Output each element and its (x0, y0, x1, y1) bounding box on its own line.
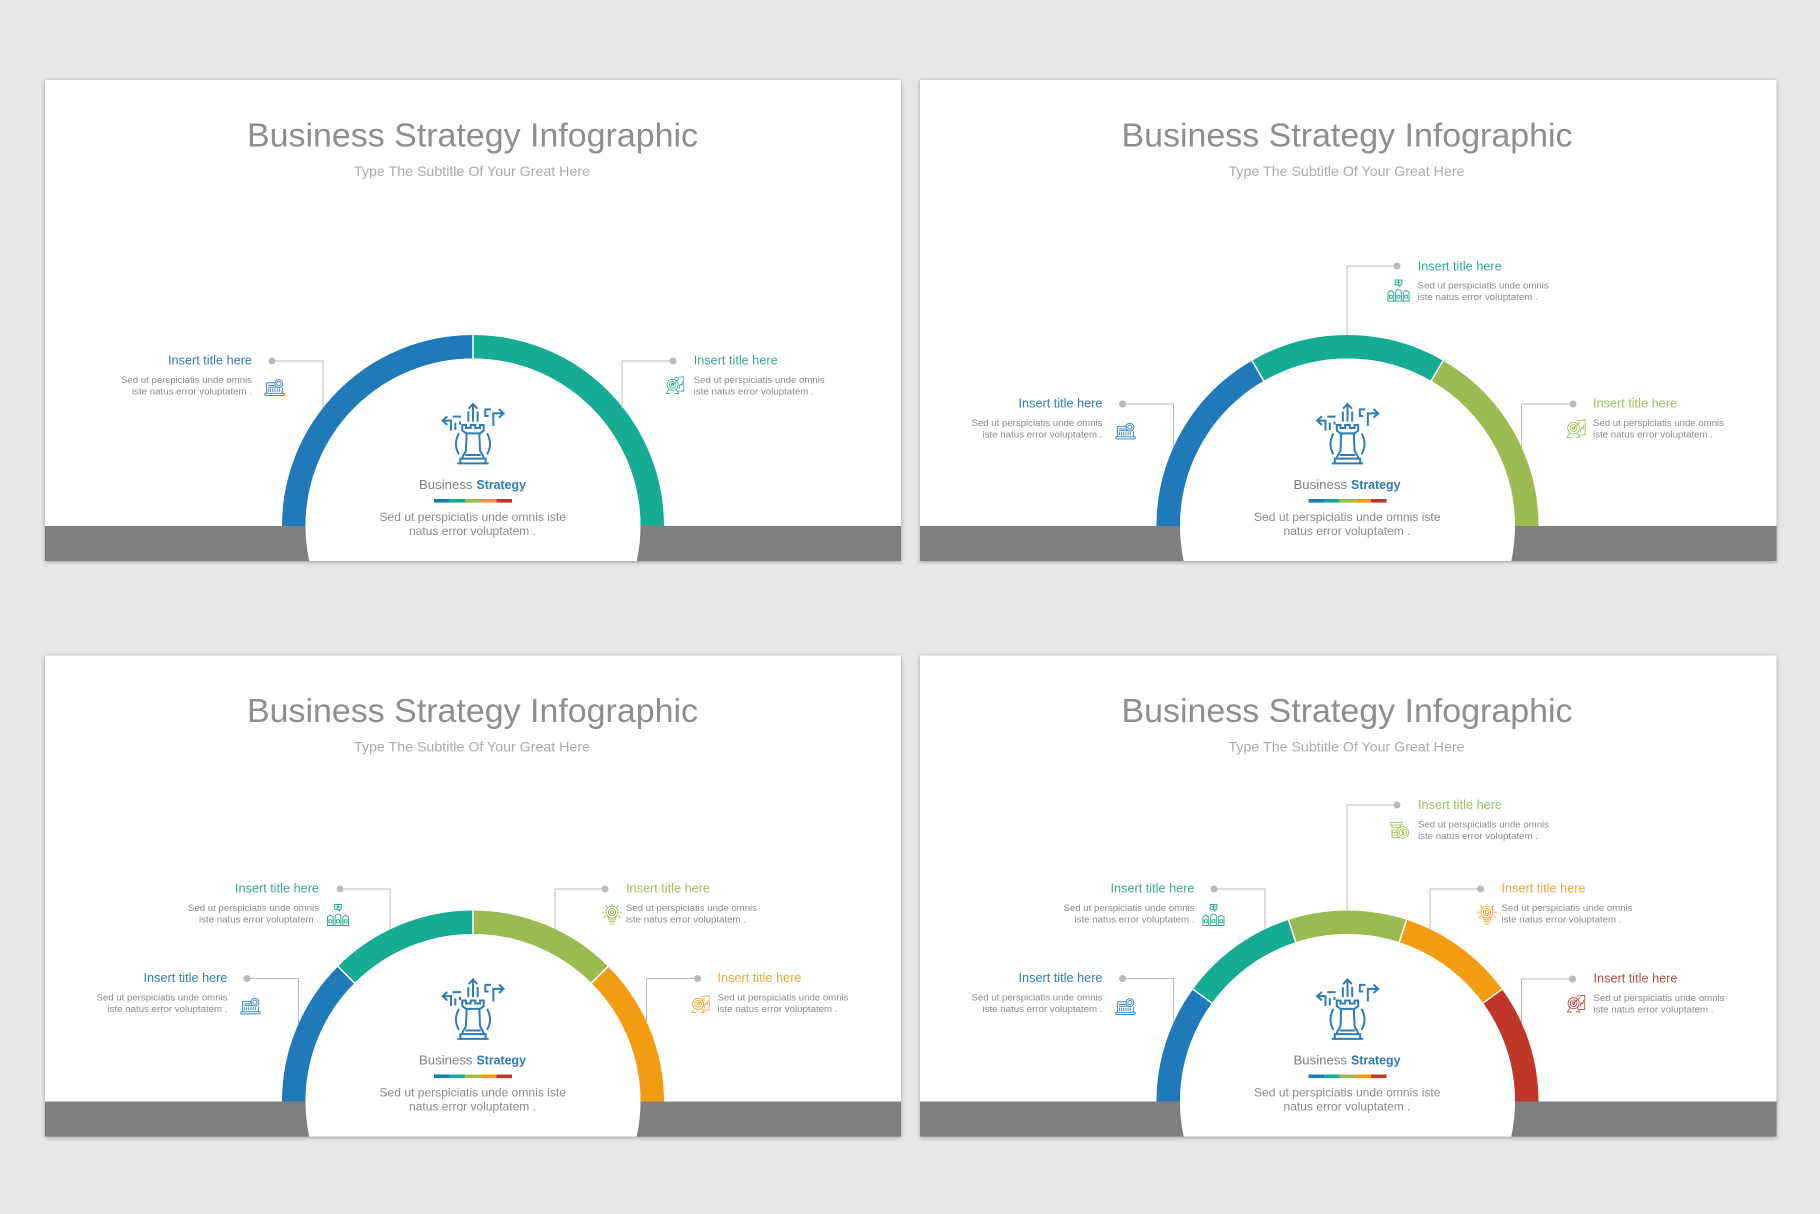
centre description: natus error voluptatem . (409, 524, 536, 538)
centre description (380, 510, 566, 538)
callout: blue left (972, 970, 1174, 1024)
callout: orange right (646, 970, 849, 1024)
centre description (1254, 1086, 1441, 1114)
slide panel (45, 80, 901, 561)
centre heading: Business (419, 477, 473, 492)
subtitle: Type The Subtitle Of Your Great Here (1228, 163, 1465, 179)
title: Business Strategy Infographic (1122, 116, 1572, 154)
centre description: Sed ut perspiciatis unde omnis iste (1254, 1086, 1441, 1100)
semicircle ring with 3 segments (1168, 347, 1527, 561)
ground bar (45, 1102, 901, 1136)
callout: teal top: Insert title here (1418, 258, 1502, 274)
callout: orange upper right: Insert title here (1502, 880, 1586, 896)
callout: teal top (1347, 258, 1549, 335)
callout: teal right: Sed ut perspiciatis unde omnis (694, 375, 825, 386)
callout: orange right: Insert title here (718, 970, 802, 985)
callout: blue left: Insert title here (1018, 970, 1102, 985)
centre heading: Strategy (476, 1052, 527, 1068)
callout: teal upper left: Insert title here (1110, 880, 1194, 896)
callout: teal upper left: Insert title here (235, 880, 319, 896)
centre heading: Business (1294, 1052, 1348, 1068)
callout: red right: Insert title here (1594, 970, 1678, 986)
callout: teal right: Insert title here (694, 352, 778, 368)
slide panel (920, 80, 1776, 561)
callout: blue left (972, 396, 1174, 447)
centre heading: Business (419, 1052, 473, 1068)
semicircle ring with 5 segments (1168, 918, 1527, 1136)
callout: teal upper left (1064, 880, 1265, 930)
callout: blue left: iste natus error voluptatem . (108, 1004, 228, 1015)
callout: green top: Sed ut perspiciatis unde omnis (1418, 819, 1549, 830)
callout: blue left: Sed ut perspiciatis unde omnis (121, 375, 252, 386)
semicircle ring with 2 segments (294, 333, 652, 561)
centre block (380, 404, 566, 538)
centre description: Sed ut perspiciatis unde omnis iste (380, 510, 566, 524)
slide 2: three segments (920, 80, 1776, 561)
callout: blue left: Sed ut perspiciatis unde omnis (972, 992, 1103, 1003)
callout: orange right: Sed ut perspiciatis unde omnis (718, 992, 849, 1003)
callout: blue left (96, 970, 298, 1024)
centre heading: Business (1294, 477, 1348, 492)
callout: green upper right (555, 880, 757, 930)
callout: green upper right: Sed ut perspiciatis unde omnis (626, 903, 757, 914)
callout: green right: Sed ut perspiciatis unde omnis (1593, 418, 1724, 429)
slide panel (45, 656, 901, 1136)
callout: green right: Insert title here (1593, 396, 1677, 410)
icon: chess rook with arrows (1317, 980, 1378, 1039)
slide 4: five segments (920, 656, 1776, 1136)
callout: teal upper left: Sed ut perspiciatis unde omnis (1064, 903, 1195, 914)
ground bar (920, 526, 1776, 561)
subtitle: Type The Subtitle Of Your Great Here (1228, 738, 1465, 754)
ground bar (920, 1102, 1776, 1136)
callout: blue left: Insert title here (1018, 396, 1102, 410)
callout: green top (1347, 797, 1549, 910)
callout: blue left: iste natus error voluptatem . (982, 1004, 1102, 1015)
icon: chess rook with arrows (1317, 404, 1378, 463)
callout: blue left: iste natus error voluptatem . (132, 386, 252, 397)
callout: red right: Sed ut perspiciatis unde omnis (1594, 993, 1725, 1004)
callout: teal upper left: Sed ut perspiciatis unde omnis (188, 903, 319, 914)
callout: green top: Insert title here (1418, 797, 1502, 812)
callout: green upper right: iste natus error voluptatem . (626, 914, 746, 925)
centre heading (1294, 477, 1401, 492)
callout: orange upper right (1430, 880, 1633, 930)
title: Business Strategy Infographic (247, 116, 698, 154)
colour bar (1308, 499, 1386, 503)
centre heading (419, 1052, 527, 1068)
centre heading (419, 477, 527, 492)
ground bar (45, 526, 901, 561)
callout: blue left: Insert title here (168, 352, 252, 368)
centre block (1254, 404, 1441, 538)
callout: teal top: iste natus error voluptatem . (1418, 292, 1538, 303)
callout: teal right (622, 352, 825, 408)
icon: chess rook with arrows (443, 980, 504, 1039)
callout: green top: iste natus error voluptatem . (1418, 831, 1538, 842)
centre heading: Strategy (476, 477, 527, 492)
colour bar (434, 499, 512, 503)
centre heading: Strategy (1351, 477, 1401, 492)
callout: red right (1522, 970, 1725, 1024)
callout: green right (1522, 396, 1724, 447)
callout: green upper right: Insert title here (626, 880, 710, 896)
slide 3: four segments (45, 656, 901, 1136)
callout: green right: iste natus error voluptatem . (1593, 429, 1713, 440)
semicircle ring with 4 segments (294, 908, 652, 1136)
title: Business Strategy Infographic (1122, 692, 1572, 729)
centre heading: Strategy (1351, 1052, 1401, 1068)
callout: orange upper right: Sed ut perspiciatis unde omnis (1502, 903, 1633, 914)
centre description: natus error voluptatem . (1284, 524, 1410, 538)
callout: teal upper left (188, 880, 390, 930)
subtitle: Type The Subtitle Of Your Great Here (354, 163, 590, 179)
callout: teal upper left: iste natus error voluptatem . (1074, 914, 1194, 925)
callout: blue left: Sed ut perspiciatis unde omnis (96, 992, 228, 1003)
callout: orange right: iste natus error voluptatem . (718, 1004, 838, 1015)
slide panel (920, 656, 1776, 1136)
centre description (1254, 510, 1441, 538)
slide 1: two segments (45, 80, 901, 561)
centre description: Sed ut perspiciatis unde omnis iste (380, 1086, 566, 1100)
centre block (1254, 980, 1441, 1114)
centre block (380, 980, 566, 1114)
callout: red right: iste natus error voluptatem . (1594, 1004, 1714, 1015)
callout: blue left: iste natus error voluptatem . (982, 429, 1102, 440)
callout: teal right: iste natus error voluptatem . (694, 386, 814, 397)
title: Business Strategy Infographic (247, 692, 698, 729)
centre heading (1294, 1052, 1401, 1068)
callout: blue left: Insert title here (144, 970, 228, 985)
centre description: natus error voluptatem . (409, 1100, 536, 1114)
colour bar (1308, 1074, 1386, 1078)
centre description: natus error voluptatem . (1284, 1100, 1410, 1114)
callout: orange upper right: iste natus error voluptatem . (1502, 914, 1622, 925)
centre description (380, 1086, 566, 1114)
callout: teal top: Sed ut perspiciatis unde omnis (1418, 280, 1549, 291)
icon: chess rook with arrows (443, 404, 504, 463)
callout: blue left (121, 352, 323, 408)
centre description: Sed ut perspiciatis unde omnis iste (1254, 510, 1441, 524)
callout: teal upper left: iste natus error voluptatem . (199, 914, 319, 925)
subtitle: Type The Subtitle Of Your Great Here (354, 738, 590, 754)
colour bar (434, 1074, 512, 1078)
callout: blue left: Sed ut perspiciatis unde omnis (972, 418, 1103, 429)
